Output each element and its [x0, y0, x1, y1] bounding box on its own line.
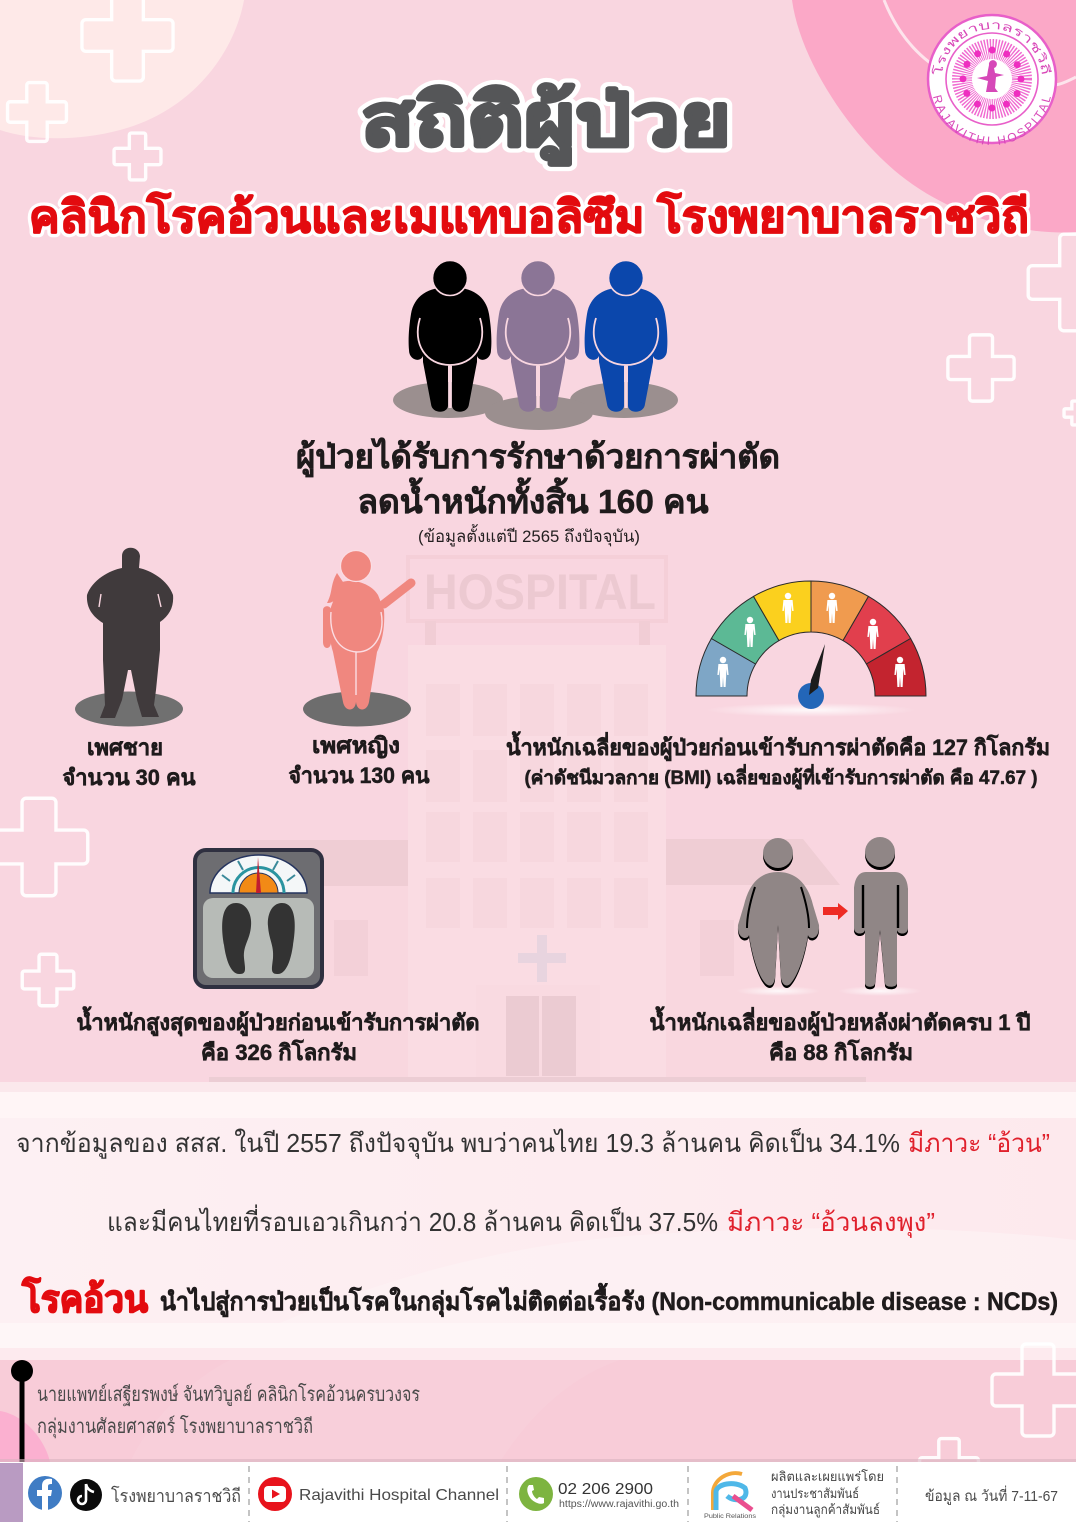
label: female count: เพศหญิง: [312, 733, 400, 759]
panel: statistics text band: [0, 1082, 1076, 1360]
icon: facebook: [28, 1476, 62, 1510]
label: male count: เพศชาย: [87, 735, 163, 760]
text: youtube channel: Rajavithi Hospital Channel: [299, 1487, 499, 1504]
text: abdominal obesity statistic: มีภาวะ “อ้วนลงพุง”: [727, 1207, 935, 1238]
label: average weight and BMI: (ค่าดัชนีมวลกาย (BMI) เฉลี่ยของผู้ที่เข้ารับการผ่าตัด คือ 47.67 ): [524, 764, 1038, 790]
decorative plus outlines: [0, 0, 1076, 1006]
title: สถิติผู้ป่วย: [361, 81, 731, 166]
label: female count: [288, 733, 430, 788]
text: hospital page name: โรงพยาบาลราชวิถี: [111, 1485, 241, 1506]
subtitle: คลินิกโรคอ้วนและเมแทบอลิซึม โรงพยาบาลราชวิถี: [29, 190, 1029, 242]
headline: total patients: (ข้อมูลตั้งแต่ปี 2565 ถึงปัจจุบัน): [418, 524, 640, 547]
text: produced by: [771, 1469, 884, 1518]
text: produced by: กลุ่มงานลูกค้าสัมพันธ์: [771, 1502, 880, 1518]
label: average weight after one year: [650, 1006, 1031, 1065]
chart: BMI gauge: [696, 581, 926, 717]
label: average weight and BMI: น้ำหนักเฉลี่ยของผู้ป่วยก่อนเข้ารับการผ่าตัดคือ 127 กิโลกรัม: [506, 731, 1050, 762]
label: highest weight: น้ำหนักสูงสุดของผู้ป่วยก่อนเข้ารับการผ่าตัด: [76, 1006, 480, 1037]
background hospital watermark: HOSPITAL: [424, 564, 656, 620]
icon: youtube: [258, 1477, 292, 1511]
icon: weighing scale: [195, 850, 322, 987]
panel: credit section: [0, 1344, 1076, 1497]
text: phone and website: 02 206 2900: [558, 1481, 653, 1498]
credit: physician and department: [37, 1383, 420, 1439]
title: สถิติผู้ป่วย: [361, 81, 731, 166]
icon: public relations logo: Public Relations: [704, 1513, 757, 1520]
label: male count: จำนวน 30 คน: [62, 765, 196, 790]
text: data date: ข้อมูล ณ วันที่ 7-11-67: [925, 1485, 1058, 1505]
icon: female figure: [303, 550, 411, 726]
background hospital watermark: [209, 557, 866, 1082]
illustration: three obese figures: [393, 260, 678, 430]
text: produced by: ผลิตและเผยแพร่โดย: [771, 1469, 884, 1484]
credit: physician and department: กลุ่มงานศัลยศาสตร์ โรงพยาบาลราชวิถี: [37, 1415, 313, 1439]
text: phone and website: [558, 1481, 679, 1510]
credit: physician and department: นายแพทย์เสฐียรพงษ์ จันทวิบูลย์ คลินิกโรคอ้วนครบวงจร: [37, 1383, 420, 1407]
icon: tiktok: [70, 1479, 102, 1511]
hospital logo: โรงพยาบาลราชวิถี: [932, 22, 1052, 74]
label: average weight and BMI: [506, 731, 1050, 790]
label: average weight after one year: คือ 88 กิโลกรัม: [769, 1039, 913, 1065]
text: abdominal obesity statistic: [107, 1204, 935, 1238]
headline: total patients: ผู้ป่วยได้รับการรักษาด้วยการผ่าตัด: [296, 437, 780, 478]
text: phone and website: https://www.rajavithi.go.th: [559, 1499, 679, 1510]
label: average weight after one year: น้ำหนักเฉลี่ยของผู้ป่วยหลังผ่าตัดครบ 1 ปี: [650, 1006, 1031, 1037]
icon: before and after weight loss: [736, 837, 922, 996]
headline: total patients: ลดน้ำหนักทั้งสิ้น 160 คน: [358, 477, 709, 520]
text: obesity statistic: จากข้อมูลของ สสส. ในปี 2557 ถึงปัจจุบัน พบว่าคนไทย 19.3 ล้านคน คิดเป็น 34.1%: [16, 1127, 900, 1159]
subtitle: คลินิกโรคอ้วนและเมแทบอลิซึม โรงพยาบาลราชวิถี: [29, 190, 1029, 242]
text: obesity statistic: มีภาวะ “อ้วน”: [908, 1128, 1050, 1158]
hospital logo: [926, 14, 1058, 145]
hospital logo: RAJAVITHI HOSPITAL: [933, 95, 1051, 145]
footer bar: [0, 1459, 1076, 1522]
text: produced by: งานประชาสัมพันธ์: [771, 1486, 859, 1501]
text: NCDs statement: [21, 1276, 1058, 1321]
label: male count: [62, 735, 196, 790]
icon: male silhouette: [75, 548, 183, 726]
background blobs: [0, 0, 1076, 232]
icon: public relations logo: [704, 1473, 757, 1520]
text: NCDs statement: โรคอ้วน: [21, 1276, 148, 1321]
label: highest weight: คือ 326 กิโลกรัม: [201, 1039, 357, 1065]
text: abdominal obesity statistic: และมีคนไทยที่รอบเอวเกินกว่า 20.8 ล้านคน คิดเป็น 37.5%: [107, 1204, 718, 1237]
label: highest weight: [76, 1006, 480, 1065]
icon: phone: [519, 1477, 553, 1511]
headline: total patients: [296, 437, 780, 547]
label: female count: จำนวน 130 คน: [288, 763, 430, 788]
